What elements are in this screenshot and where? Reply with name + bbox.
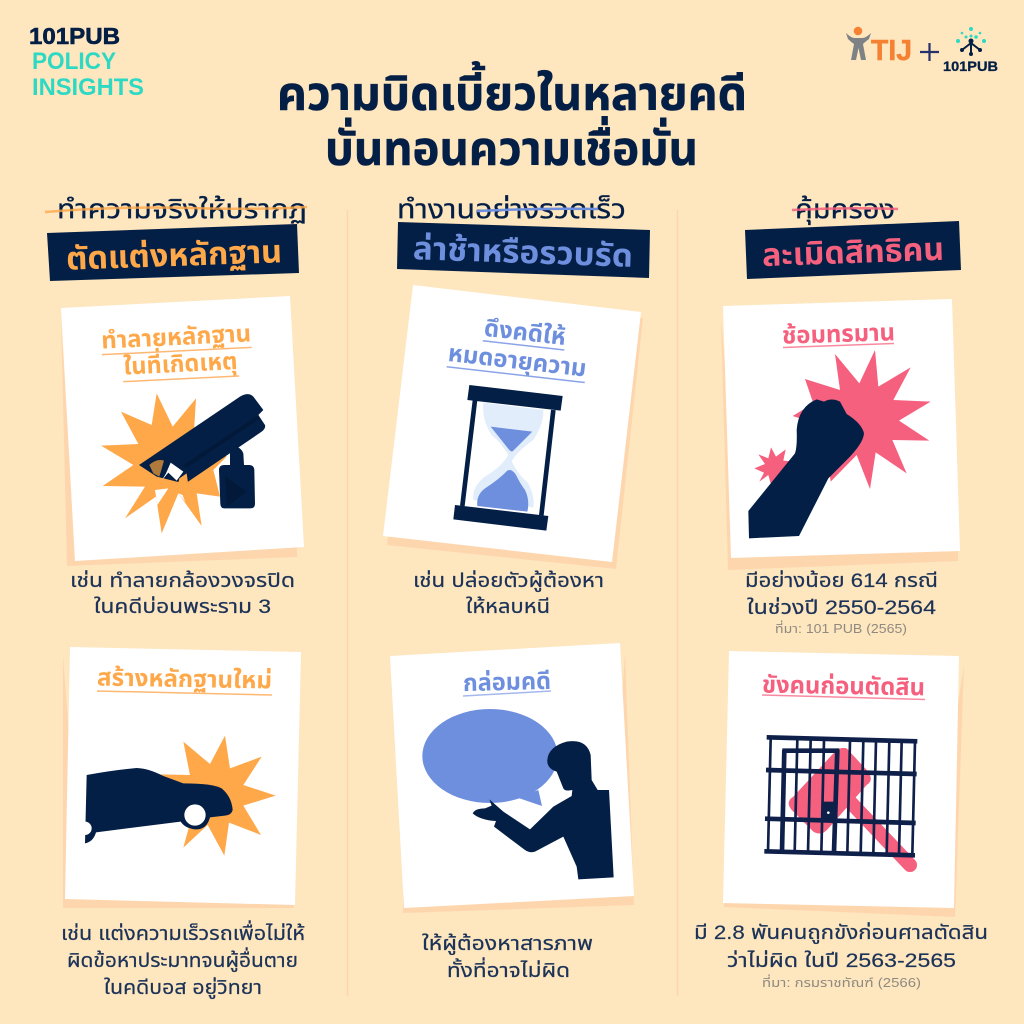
icon: fist with impact <box>748 350 931 538</box>
icon: speaker with speech bubble <box>422 709 614 879</box>
panel: fabricate evidence <box>61 647 305 1000</box>
card title: torture: ช้อมทรมาน <box>782 318 895 350</box>
card title: delay until expiry: หมดอายุความ <box>447 340 588 384</box>
column heading: rights <box>745 194 961 279</box>
logo: 101PUB Policy Insights: INSIGHTS <box>32 74 144 101</box>
caption: ในคดีบ่อนพระราม 3 <box>94 595 271 618</box>
panel: coerce <box>390 643 634 982</box>
column heading: rights: คุ้มครอง <box>795 194 895 225</box>
card title: delay until expiry <box>447 310 591 384</box>
panel: delay case <box>383 285 643 618</box>
column heading: evidence: ตัดแต่งหลักฐาน <box>65 233 283 277</box>
icon: crashed car <box>85 736 276 856</box>
caption with source: ในช่วงปี 2550-2564 <box>747 596 936 619</box>
caption with source: ที่มา: 101 PUB (2565) <box>775 620 907 636</box>
logo: 101PUB Policy Insights: 101PUB <box>29 23 120 49</box>
card title: delay until expiry: ดึงคดีให้ <box>483 314 567 351</box>
column heading: evidence <box>45 194 307 281</box>
caption: ให้ผู้ต้องหาสารภาพ <box>422 932 593 956</box>
logo: 101PUB Policy Insights <box>29 23 144 101</box>
caption with source: ว่าไม่ผิด ในปี 2563-2565 <box>727 949 956 972</box>
icon: hourglass <box>453 385 563 531</box>
caption: ทั้งที่อาจไม่ผิด <box>447 957 570 982</box>
logo: TIJ + 101PUB: 101PUB <box>943 58 998 74</box>
column heading: evidence: ทำความจริงให้ปรากฏ <box>57 194 307 224</box>
caption: ผิดข้อหาประมาทจนผู้อื่นตาย <box>67 947 298 973</box>
caption <box>61 920 305 1000</box>
panel: destroy evidence <box>61 296 304 618</box>
icon: broken CCTV camera <box>101 393 265 533</box>
caption with source <box>694 921 988 990</box>
caption with source <box>745 569 938 636</box>
caption: ให้หลบหนี <box>466 595 550 618</box>
caption: เช่น แต่งความเร็วรถเพื่อไม่ให้ <box>61 920 305 945</box>
logo: TIJ + 101PUB <box>846 27 998 74</box>
logo: TIJ + 101PUB: TIJ <box>871 35 912 67</box>
column heading: rights: ละเมิดสิทธิคน <box>761 231 945 273</box>
card title: jail before verdict: ขังคนก่อนตัดสิน <box>762 671 925 701</box>
caption <box>70 569 295 618</box>
card title: destroy evidence: ทำลายหลักฐาน <box>101 320 252 355</box>
caption with source: มีอย่างน้อย 614 กรณี <box>745 569 938 592</box>
column heading: speed: ทำงานอย่างรวดเร็ว <box>397 194 626 224</box>
panel: pre-trial detention <box>694 651 988 990</box>
caption <box>413 569 604 618</box>
logo: 101PUB Policy Insights: POLICY <box>32 48 116 75</box>
caption with source: มี 2.8 พันคนถูกขังก่อนศาลตัดสิน <box>694 921 988 945</box>
caption <box>422 932 593 982</box>
panel: torture <box>721 299 960 636</box>
card title: fabricate evidence: สร้างหลักฐานใหม่ <box>97 663 272 695</box>
column heading: speed: ล่าช้าหรือรวบรัด <box>412 230 634 274</box>
column heading: speed <box>397 194 650 278</box>
title <box>277 61 747 175</box>
title: ความบิดเบี้ยวในหลายคดี <box>277 61 747 120</box>
card title: destroy evidence: ในที่เกิดเหตุ <box>123 344 238 382</box>
card title: persuade: กล่อมคดี <box>463 667 551 697</box>
caption: ในคดีบอส อยู่วิทยา <box>104 976 262 1000</box>
card title: destroy evidence <box>101 320 253 383</box>
caption: เช่น ทำลายกล้องวงจรปิด <box>70 569 295 592</box>
title: บั่นทอนความเชื่อมั่น <box>325 116 698 175</box>
caption: เช่น ปล่อยตัวผู้ต้องหา <box>413 569 604 593</box>
icon: gavel behind bars <box>764 737 917 865</box>
caption with source: ที่มา: กรมราชทัณฑ์ (2566) <box>762 974 921 990</box>
